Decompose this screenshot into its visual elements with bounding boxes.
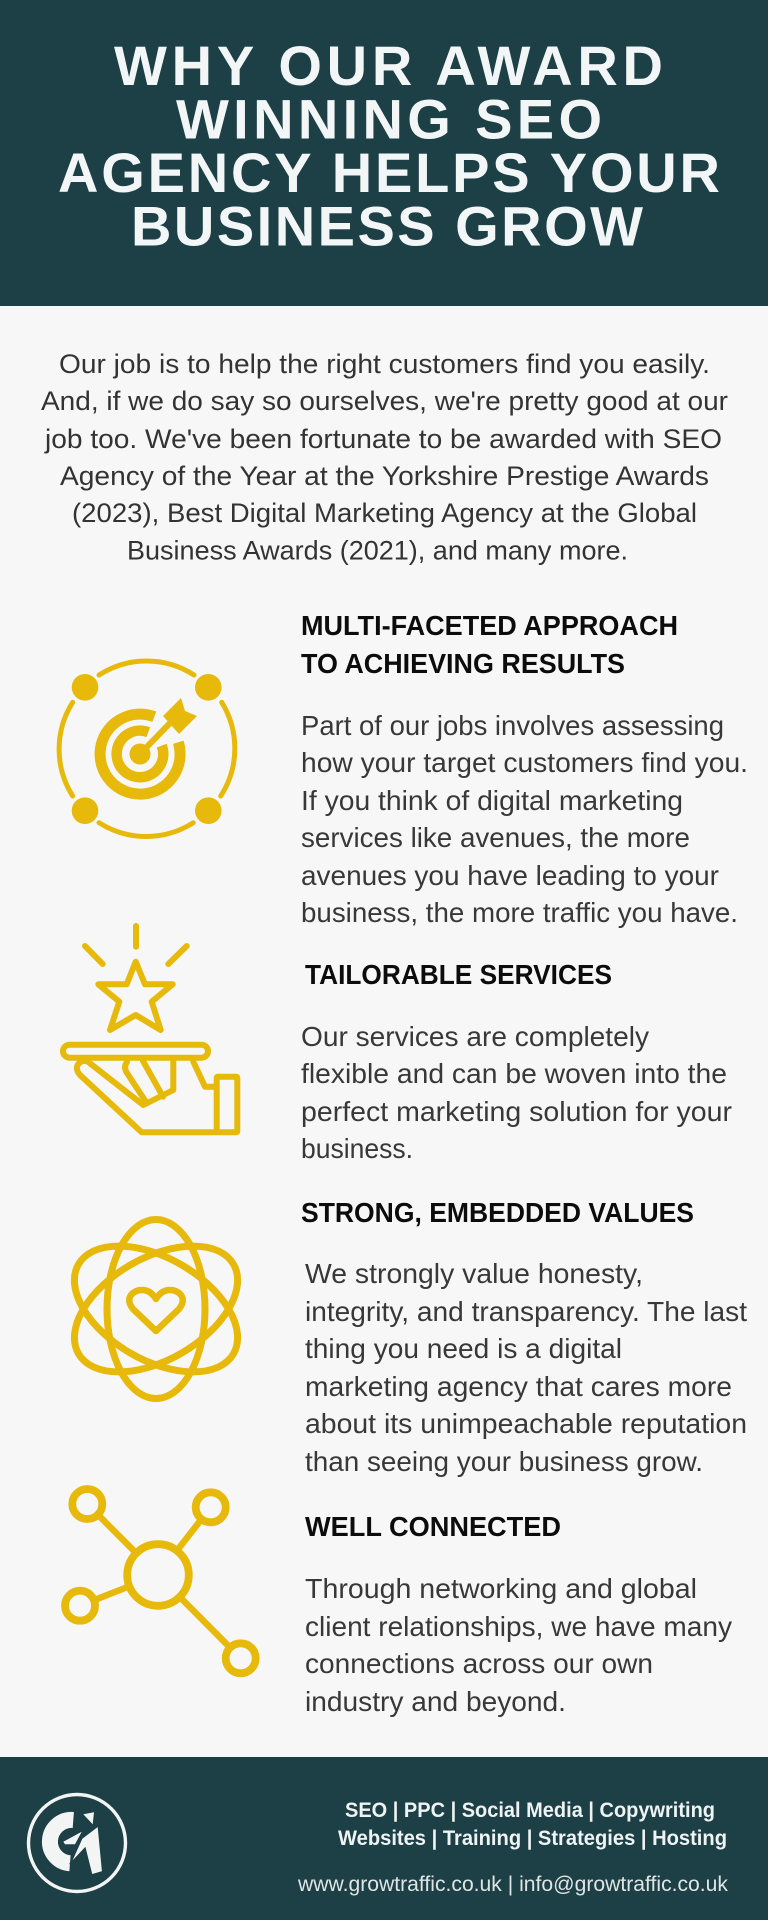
body: multi-faceted approach: Part of our jobs involves assessing bbox=[301, 710, 724, 741]
heading: multi-faceted approach bbox=[301, 610, 678, 679]
body: well connected: industry and beyond. bbox=[305, 1686, 566, 1717]
contact details: www.growtraffic.co.uk | info@growtraffic.co.uk bbox=[297, 1873, 728, 1896]
section 4 text bbox=[305, 1511, 732, 1717]
intro paragraph: Agency of the Year at the Yorkshire Prestige Awards bbox=[60, 461, 709, 491]
services list: SEO | PPC | Social Media | Copywriting bbox=[345, 1799, 715, 1822]
title: BUSINESS GROW bbox=[131, 195, 643, 258]
heading: multi-faceted approach: TO ACHIEVING RESULTS bbox=[301, 648, 625, 679]
body: multi-faceted approach: services like avenues, the more bbox=[301, 822, 690, 853]
title bbox=[58, 34, 720, 258]
intro paragraph bbox=[41, 349, 728, 566]
body: tailorable services: business. bbox=[301, 1133, 413, 1164]
body: strong embedded values: integrity, and transparency. The last bbox=[305, 1296, 747, 1327]
body: well connected: client relationships, we have many bbox=[305, 1611, 732, 1642]
services list: Websites | Training | Strategies | Hosting bbox=[338, 1827, 727, 1850]
body: strong embedded values: We strongly value honesty, bbox=[305, 1258, 643, 1289]
body: tailorable services: perfect marketing solution for your bbox=[301, 1096, 732, 1127]
intro paragraph: job too. We've been fortunate to be awarded with SEO bbox=[44, 424, 722, 454]
intro paragraph: (2023), Best Digital Marketing Agency at the Global bbox=[72, 498, 697, 528]
section 2 text bbox=[301, 959, 732, 1164]
body: strong embedded values: about its unimpeachable reputation bbox=[305, 1408, 747, 1439]
body: multi-faceted approach: avenues you have leading to your bbox=[301, 860, 719, 891]
body: multi-faceted approach bbox=[301, 710, 748, 928]
body: multi-faceted approach: how your target customers find you. bbox=[301, 747, 748, 778]
heading: tailorable services: TAILORABLE SERVICES bbox=[305, 959, 612, 990]
body: well connected: Through networking and global bbox=[305, 1573, 697, 1604]
title: AGENCY HELPS YOUR bbox=[58, 141, 720, 204]
body: multi-faceted approach: If you think of digital marketing bbox=[301, 785, 683, 816]
title: WHY OUR AWARD bbox=[114, 34, 663, 97]
intro paragraph: Our job is to help the right customers find you easily. bbox=[59, 349, 710, 379]
icon: network nodes bbox=[65, 1489, 256, 1673]
body: strong embedded values: marketing agency that cares more bbox=[305, 1371, 732, 1402]
body: well connected: connections across our own bbox=[305, 1648, 653, 1679]
body: strong embedded values: thing you need is a digital bbox=[305, 1333, 622, 1364]
body: well connected bbox=[305, 1573, 732, 1717]
icon: atom with heart bbox=[53, 1220, 259, 1398]
footer banner bbox=[0, 1757, 768, 1920]
intro paragraph: Business Awards (2021), and many more. bbox=[127, 536, 628, 566]
services list bbox=[338, 1799, 727, 1850]
logo bbox=[28, 1794, 126, 1892]
body: tailorable services bbox=[301, 1021, 732, 1164]
icon: target with arrow bbox=[59, 661, 235, 836]
heading: strong embedded values: STRONG, EMBEDDED VALUES bbox=[301, 1197, 694, 1228]
body: tailorable services: Our services are completely bbox=[301, 1021, 649, 1052]
body: strong embedded values: than seeing your business grow. bbox=[305, 1446, 703, 1477]
section 1 text bbox=[301, 610, 748, 928]
body: strong embedded values bbox=[305, 1258, 747, 1477]
title: WINNING SEO bbox=[176, 88, 602, 150]
section 3 text bbox=[301, 1197, 747, 1477]
heading: multi-faceted approach: MULTI-FACETED APPROACH bbox=[301, 610, 678, 641]
icon: star on hand tray bbox=[63, 926, 237, 1132]
body: multi-faceted approach: business, the more traffic you have. bbox=[301, 897, 738, 928]
intro paragraph: And, if we do say so ourselves, we're pretty good at our bbox=[41, 386, 728, 416]
body: tailorable services: flexible and can be woven into the bbox=[301, 1058, 727, 1089]
header banner bbox=[0, 0, 768, 306]
heading: well connected: WELL CONNECTED bbox=[305, 1511, 561, 1542]
